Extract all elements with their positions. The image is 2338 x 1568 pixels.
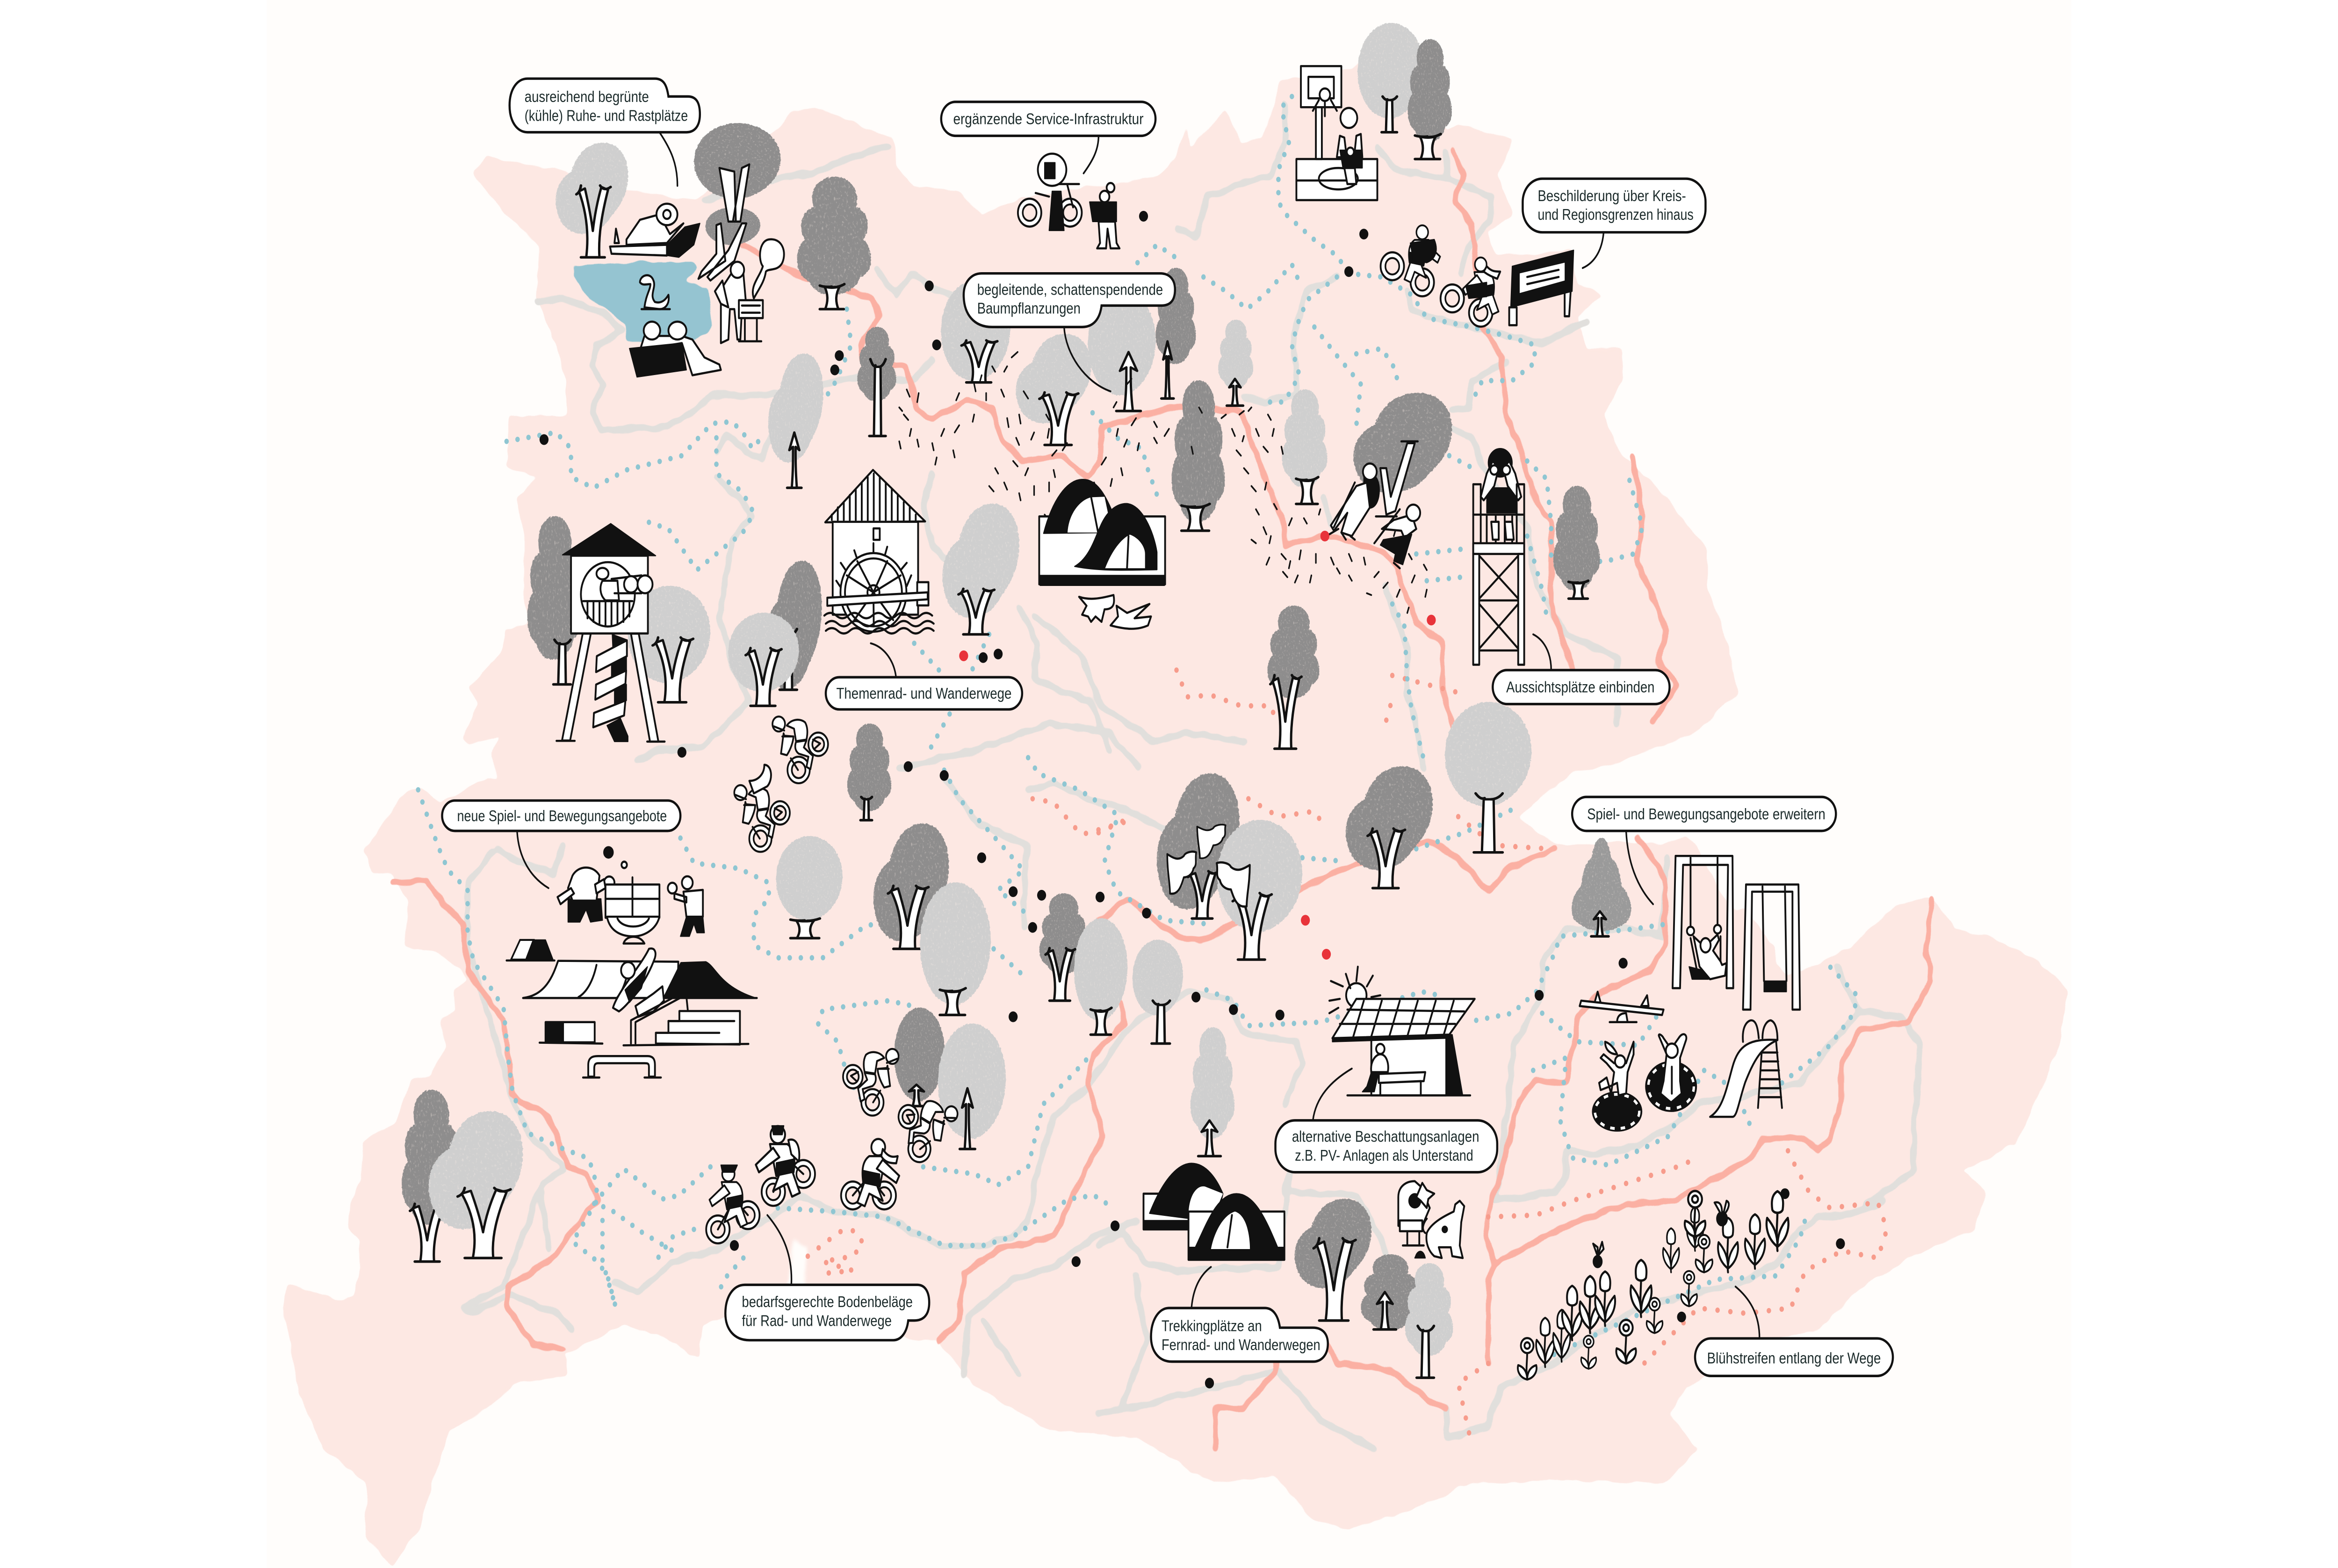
callout: Spiel- und Bewegungsangebote erweitern <box>1572 797 1836 831</box>
tree row: planted trees <box>941 268 1225 531</box>
tree: light crown at bend <box>1282 390 1328 504</box>
icon: slide <box>1710 1020 1782 1117</box>
salmon rivers <box>393 150 1932 1449</box>
callout: Aussichtsplätze: Aussichtsplätze einbinden <box>1506 678 1654 696</box>
callout: Beschattungsanlagen <box>1276 1120 1497 1172</box>
icon: solar shelter with sun <box>1329 967 1475 1095</box>
icon: trampolines with children <box>1592 1034 1696 1131</box>
callout: Blühstreifen: Blühstreifen entlang der Wege <box>1707 1349 1881 1367</box>
icon: swan on lake <box>640 275 670 309</box>
tree: by viewing tower <box>1553 486 1600 599</box>
tree: slim dark <box>857 327 896 436</box>
callout: Beschilderung: und Regionsgrenzen hinaus <box>1537 206 1694 224</box>
callout: neue Spiel- und Bewegungsangebote: neue Spiel- und Bewegungsangebote <box>457 807 667 824</box>
trees: basketball court pair <box>1357 23 1452 159</box>
tree cluster: northwest <box>556 123 780 281</box>
tree: dark near bikers <box>847 724 891 820</box>
callout: Trekkingplätze: Trekkingplätze an <box>1162 1317 1262 1335</box>
tree: dark east <box>1346 766 1433 888</box>
tree: dark crown behind hikers <box>1353 393 1452 516</box>
icon: skate park <box>506 940 757 1077</box>
callout: neue Spiel- und Bewegungsangebote <box>442 801 680 831</box>
salmon dotted trails <box>808 670 1887 1438</box>
callout: Beschattungsanlagen: alternative Beschattungsanlagen <box>1292 1127 1479 1145</box>
icon: table tennis players <box>557 846 704 944</box>
icon: sun lounger with person <box>610 204 700 257</box>
icon: tents on platform <box>1039 479 1165 585</box>
callout: Ruhe- und Rastplätze: (kühle) Ruhe- und Rastplätze <box>525 107 688 124</box>
trees next to the mill <box>728 561 822 706</box>
callout: Beschattungsanlagen: z.B. PV- Anlagen als Unterstand <box>1295 1146 1473 1164</box>
callout: Baumpflanzungen: begleitende, schattenspendende <box>977 281 1163 298</box>
icon: Nordic walkers <box>1329 463 1420 568</box>
trees with doves <box>1157 773 1302 960</box>
icon: watermill <box>824 470 934 634</box>
trees: southwest pair <box>402 1090 523 1262</box>
icon: camping tents south <box>1144 1163 1284 1260</box>
tree: dark crown with stump <box>797 177 871 309</box>
icon: viewing tower with person <box>1473 448 1524 665</box>
trees beside lookout <box>527 516 710 702</box>
icon: bike charging station with person <box>1018 154 1119 248</box>
tree: light small by path <box>1218 320 1253 405</box>
callout: Trekkingplätze: Fernrad- und Wanderwegen <box>1162 1336 1321 1353</box>
callout: Spiel- und Bewegungsangebote erweitern: Spiel- und Bewegungsangebote erweitern <box>1587 805 1826 823</box>
callout: Aussichtsplätze <box>1493 670 1670 704</box>
trees: south cluster <box>1294 1199 1453 1378</box>
black markers <box>540 211 1845 1388</box>
callout: Trekkingplätze <box>1151 1308 1328 1362</box>
trees: east of grove <box>1039 894 1183 1044</box>
icon: bikers under trees <box>843 1049 960 1172</box>
icon: couple on black bench <box>629 322 721 377</box>
tree: light with Y trunk <box>942 504 1019 635</box>
map region <box>283 54 2068 1565</box>
callout: Bodenbeläge <box>725 1285 929 1340</box>
callout: Bodenbeläge: bedarfsgerechte Bodenbeläge <box>742 1293 913 1311</box>
callout: Bodenbeläge: für Rad- und Wanderwege <box>742 1312 892 1330</box>
trees behind bikers <box>894 1008 1006 1149</box>
icon: bin and dog <box>1398 1181 1464 1258</box>
icon: swing with child <box>1673 856 1733 988</box>
tree: light spike <box>768 354 823 488</box>
callout: Beschilderung <box>1523 179 1705 232</box>
red markers <box>959 531 1436 960</box>
callout: Themenrad <box>826 677 1022 709</box>
icon: side-view bikers <box>706 1126 899 1243</box>
callout: Baumpflanzungen <box>964 274 1175 327</box>
callout: Service-Infrastruktur <box>941 102 1155 136</box>
tree: light spindle south <box>1191 1027 1234 1156</box>
lake <box>572 263 712 341</box>
callout: Ruhe- und Rastplätze: ausreichend begrünte <box>525 87 649 105</box>
icon: empty swing <box>1743 884 1800 1010</box>
icon: basketball court <box>1296 66 1378 200</box>
icon: bikers on forest trail <box>734 716 828 852</box>
icon: flower strip <box>1518 1191 1789 1380</box>
icon: cyclists at signpost <box>1381 225 1500 327</box>
callout: Themenrad: Themenrad- und Wanderwege <box>836 685 1011 702</box>
leader lines <box>517 132 1760 1338</box>
callout: Blühstreifen <box>1695 1338 1893 1376</box>
icon: regional signboard <box>1509 250 1573 325</box>
tree: spruce at swings <box>1572 838 1631 936</box>
callout: Baumpflanzungen: Baumpflanzungen <box>977 299 1081 317</box>
icon: white birds <box>1079 595 1151 629</box>
trees: central grove <box>776 824 991 1015</box>
tree: big light east <box>1445 702 1531 853</box>
grey rivers <box>463 104 1920 1449</box>
callout: Beschilderung: Beschilderung über Kreis- <box>1537 187 1686 204</box>
tree: centre slim dark <box>1268 606 1320 749</box>
icon: seesaw <box>1580 992 1664 1022</box>
icon: lookout tower with spiral stairs <box>556 524 664 742</box>
callout: Ruhe- und Rastplätze <box>510 79 700 132</box>
callout: Service-Infrastruktur: ergänzende Service-Infrastruktur <box>953 110 1144 128</box>
icon: hiker at sign with speech balloon <box>715 239 784 343</box>
teal dotted trails <box>418 96 1857 1354</box>
grass ticks along the planted path <box>899 352 1427 613</box>
